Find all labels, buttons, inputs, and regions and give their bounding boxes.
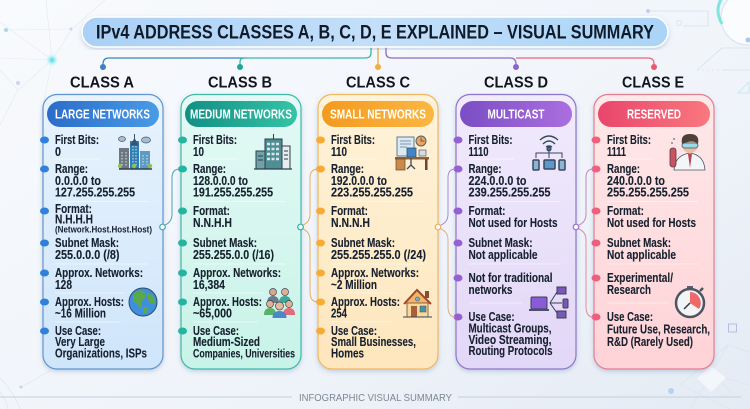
text: subnet mask	[193, 236, 274, 262]
text: format	[331, 204, 370, 230]
text: subnet mask: Subnet Mask:	[607, 236, 671, 250]
text: range: Range:	[468, 162, 502, 176]
text: format: Not used for Hosts	[607, 216, 696, 230]
text: use case: Small Businesses,	[331, 335, 416, 349]
text: range	[607, 162, 689, 200]
title banner	[82, 17, 668, 47]
text: first bits: First Bits:	[331, 133, 375, 147]
heading: class D: CLASS D	[484, 74, 548, 92]
footer line and caption	[0, 388, 741, 404]
text: subnet mask: Subnet Mask:	[193, 236, 257, 250]
heading: class E: CLASS E	[622, 74, 684, 92]
row dots	[316, 136, 325, 334]
text: format: (Network.Host.Host.Host)	[55, 224, 152, 236]
panel: class C	[316, 94, 438, 369]
title banner: IPv4 ADDRESS CLASSES A, B, C, D, E EXPLAINED – VISUAL SUMMARY	[96, 22, 654, 44]
text: range: 128.0.0.0 to	[193, 174, 248, 188]
text: use case: Future Use, Research,	[607, 322, 710, 336]
text: experimental research: Research	[607, 283, 651, 297]
text: approx networks: Approx. Networks:	[331, 266, 419, 280]
text: format: Format:	[193, 204, 230, 218]
pill: small networks: SMALL NETWORKS	[330, 108, 426, 122]
text: range: 191.255.255.255	[193, 186, 273, 200]
text: subnet mask: 255.0.0.0 (/8)	[55, 248, 120, 262]
text: use case: Medium-Sized	[193, 335, 260, 349]
text: approx networks: Approx. Networks:	[193, 266, 281, 280]
text: approx hosts: 254	[331, 306, 347, 320]
text: use case: Use Case:	[607, 310, 653, 324]
text: range: 224.0.0.0 to	[468, 174, 527, 188]
pill: large networks: LARGE NETWORKS	[55, 108, 150, 122]
text: format: Format:	[468, 204, 506, 218]
text: range	[331, 162, 413, 200]
text: format	[193, 204, 232, 230]
text: format: Not used for Hosts	[468, 216, 558, 230]
text: approx hosts	[331, 295, 400, 320]
text: subnet mask: Subnet Mask:	[468, 236, 532, 250]
decorative circuit top-right	[646, 0, 750, 93]
text: use case	[331, 324, 416, 360]
text: use case: Use Case:	[193, 324, 239, 338]
icon: wifi multicast	[533, 136, 565, 170]
connector: C to D	[435, 169, 455, 317]
connectors from title to class headings	[100, 47, 657, 70]
text: range: 223.255.255.255	[331, 186, 413, 200]
text: use case	[55, 324, 147, 360]
text: use case: R&D (Rarely Used)	[607, 335, 693, 349]
text: range: 255.255.255.255	[607, 186, 689, 200]
text: approx hosts: Approx. Hosts:	[55, 295, 124, 309]
decorative network bottom	[0, 324, 750, 409]
text: range: Range:	[331, 162, 364, 176]
text: range: 240.0.0.0 to	[607, 174, 665, 188]
panel: class A	[40, 94, 163, 369]
text: subnet mask	[468, 236, 538, 262]
text: subnet mask	[607, 236, 676, 262]
row dots	[592, 136, 600, 320]
text: format	[468, 204, 558, 230]
text: first bits	[607, 133, 651, 159]
text: use case	[193, 324, 295, 360]
panel: class E	[592, 94, 714, 369]
text: first bits: 0	[55, 145, 61, 159]
text: approx networks	[331, 266, 419, 292]
icon: office desk	[395, 136, 429, 170]
icon: house	[403, 290, 432, 317]
pill: small networks	[322, 101, 434, 127]
connector: D to E	[573, 169, 593, 317]
connector: A to B	[160, 169, 180, 230]
icon: city skyline	[118, 134, 152, 169]
text: range: 127.255.255.255	[55, 186, 135, 200]
text: range: 192.0.0.0 to	[331, 174, 387, 188]
text: experimental research: Experimental/	[607, 271, 673, 285]
text: use case: Video Streaming,	[468, 333, 552, 347]
pill: reserved	[598, 101, 710, 127]
text: format: N.N.N.H	[331, 216, 370, 230]
text: range: Range:	[607, 162, 640, 176]
text: format	[607, 204, 696, 230]
text: first bits: First Bits:	[193, 133, 237, 147]
text: range	[55, 162, 135, 200]
pill: multicast	[460, 101, 572, 127]
text: format: N.H.H.H	[55, 212, 93, 226]
text: approx hosts: Approx. Hosts:	[331, 295, 400, 309]
text: subnet mask: 255.255.255.0 (/24)	[331, 248, 426, 262]
text: first bits: First Bits:	[468, 133, 512, 147]
text: use case: Companies, Universities	[193, 348, 295, 360]
text: approx networks: Approx. Networks:	[55, 266, 143, 280]
text: subnet mask: Not applicable	[607, 248, 676, 262]
text: format: Format:	[55, 202, 92, 216]
pill: medium networks: MEDIUM NETWORKS	[190, 108, 292, 122]
row dots	[454, 136, 462, 320]
text: approx networks	[55, 266, 143, 292]
text: first bits	[193, 133, 237, 159]
text: first bits	[55, 133, 99, 159]
text: subnet mask: Not applicable	[468, 248, 538, 262]
panel: class B	[178, 94, 301, 369]
text: subnet mask	[55, 236, 120, 262]
text: use case: Routing Protocols	[468, 344, 553, 358]
text: approx networks	[193, 266, 281, 292]
text: use case: Use Case:	[331, 324, 377, 338]
text: approx hosts	[55, 295, 124, 320]
row dots	[40, 136, 49, 334]
text: approx networks: 128	[55, 278, 72, 292]
text: format: Format:	[607, 204, 644, 218]
text: format: Format:	[331, 204, 368, 218]
text: use case: Use Case:	[55, 324, 101, 338]
text: use case: Homes	[331, 346, 364, 360]
row dots	[178, 136, 187, 334]
panel: class D	[454, 94, 576, 369]
text: subnet mask: Subnet Mask:	[55, 236, 119, 250]
text: first bits: 1110	[468, 145, 489, 159]
text: use case: Multicast Groups,	[468, 322, 552, 336]
text: not for traditional networks: networks	[468, 283, 513, 297]
icon: office building	[254, 134, 292, 169]
text: approx hosts	[193, 295, 262, 320]
text: range	[468, 162, 551, 200]
text: use case: Organizations, ISPs	[55, 346, 147, 360]
icon: group of people	[264, 288, 295, 318]
text: use case: Very Large	[55, 335, 105, 349]
text: range: Range:	[193, 162, 226, 176]
text: range: Range:	[55, 162, 88, 176]
text: not for traditional networks	[468, 271, 552, 297]
icon: globe	[129, 288, 157, 316]
heading: class C: CLASS C	[346, 74, 410, 92]
text: use case	[468, 310, 553, 358]
heading: class A: CLASS A	[70, 74, 134, 92]
pill: multicast: MULTICAST	[488, 108, 545, 122]
text: approx networks: 16,384	[193, 278, 225, 292]
icon: laptop multicast network	[529, 287, 568, 318]
text: subnet mask: 255.255.0.0 (/16)	[193, 248, 274, 262]
text: first bits	[468, 133, 512, 159]
text: first bits: 1111	[607, 145, 626, 159]
text: experimental research	[607, 271, 673, 297]
icon: scientist	[670, 134, 705, 170]
text: use case: Use Case:	[468, 310, 514, 324]
text: approx hosts: ~65,000	[193, 306, 232, 320]
text: subnet mask	[331, 236, 426, 262]
text: first bits: First Bits:	[55, 133, 99, 147]
text: first bits	[331, 133, 375, 159]
text: range	[193, 162, 273, 200]
pill: reserved: RESERVED	[627, 108, 681, 122]
decorative network top-left	[0, 0, 105, 125]
pill: medium networks	[185, 101, 297, 127]
heading: class B: CLASS B	[208, 74, 272, 92]
text: range: 0.0.0.0 to	[55, 174, 101, 188]
text: format: N.N.H.H	[193, 216, 232, 230]
footer line and caption: INFOGRAPHIC VISUAL SUMMARY	[299, 392, 452, 404]
text: first bits: 10	[193, 145, 204, 159]
text: range: 239.255.255.255	[468, 186, 551, 200]
text: approx hosts: Approx. Hosts:	[193, 295, 262, 309]
pill: large networks	[47, 101, 159, 127]
text: not for traditional networks: Not for traditional	[468, 271, 552, 285]
text: first bits: 110	[331, 145, 347, 159]
text: approx networks: ~2 Million	[331, 278, 377, 292]
icon: stopwatch	[676, 286, 704, 317]
text: use case	[607, 310, 710, 349]
text: format	[55, 202, 152, 236]
connector: B to C	[298, 169, 318, 302]
text: approx hosts: ~16 Million	[55, 306, 106, 320]
text: subnet mask: Subnet Mask:	[331, 236, 395, 250]
text: first bits: First Bits:	[607, 133, 651, 147]
